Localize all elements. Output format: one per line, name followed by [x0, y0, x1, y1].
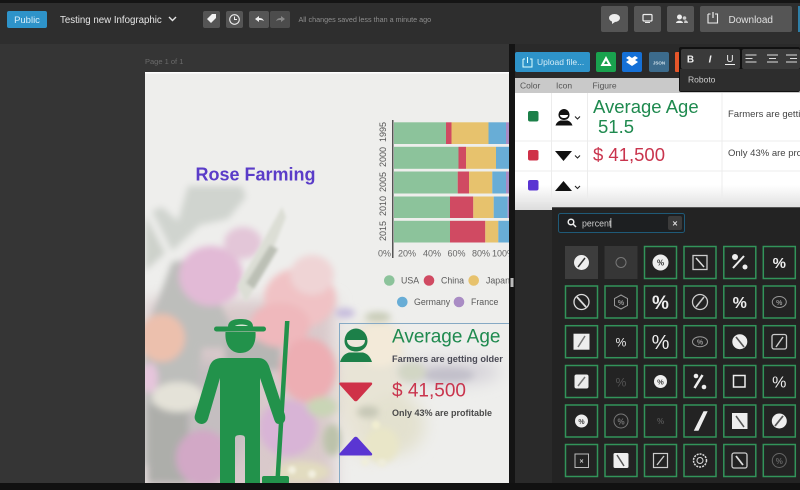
percent labels: 20% — [398, 248, 416, 258]
right side flowers — [362, 327, 398, 364]
row 3: % — [697, 340, 704, 347]
row: income — [528, 144, 800, 165]
row 3: % — [652, 332, 670, 354]
percent icons — [574, 254, 787, 468]
upload button: Upload file... — [537, 57, 584, 67]
text: profitable note: Only 43% are profitable — [392, 408, 492, 418]
json button — [649, 52, 669, 72]
search box: percent — [582, 218, 612, 228]
dark leaves — [152, 186, 246, 251]
row: income: $ 41,500 — [593, 144, 665, 165]
row 5: % — [617, 418, 625, 426]
year labels — [380, 122, 386, 240]
bar 2015 — [394, 221, 509, 242]
icon: clock — [226, 11, 243, 28]
row 2: % — [733, 295, 747, 312]
bar 2010 — [394, 196, 509, 218]
chart legend: France — [471, 297, 498, 307]
splitter bar — [509, 44, 515, 490]
row 4: % — [772, 374, 786, 392]
bar 1995 — [394, 122, 509, 144]
row 1: % — [773, 255, 786, 272]
title: Rose Farming: Rose Farming — [196, 164, 316, 184]
bold italic underline: U — [726, 54, 734, 65]
percent labels: 80% — [472, 248, 490, 258]
document title: Testing new Infographic — [60, 15, 162, 26]
chart legend: Japan — [486, 276, 510, 286]
year labels: 2000 — [378, 147, 388, 167]
row 6: % — [776, 457, 783, 466]
icon picker — [552, 207, 800, 483]
save status: All changes saved less than a minute ago — [298, 15, 431, 24]
column headers: Icon — [556, 80, 572, 90]
text: farmers note: Farmers are getting older — [392, 354, 503, 364]
icon: comment — [601, 6, 628, 32]
icon: present — [634, 6, 661, 32]
row 5 — [575, 412, 787, 430]
download button — [700, 6, 792, 32]
row: empty — [528, 180, 580, 191]
row 5: % — [578, 419, 585, 426]
search box: × — [672, 218, 678, 228]
public button — [7, 11, 47, 28]
text: income figure: $ 41,500 — [392, 380, 466, 402]
row 3 — [574, 332, 786, 354]
chart legend: China — [441, 276, 464, 286]
percent labels: 40% — [423, 248, 441, 258]
flower photo background — [139, 186, 500, 490]
row 6 — [575, 453, 786, 468]
alignment icons — [746, 55, 797, 62]
row 6: × — [579, 458, 584, 466]
icon: purple triangle — [339, 437, 372, 456]
row 2: % — [776, 300, 783, 307]
icon: drive — [596, 52, 616, 72]
row 1 — [574, 254, 786, 272]
icon: users — [667, 6, 694, 32]
percent labels: 100% — [492, 248, 515, 258]
icon: tag — [203, 11, 220, 28]
body — [195, 358, 285, 484]
roses — [179, 246, 243, 306]
bottom strip — [0, 483, 800, 490]
chart legend — [384, 275, 510, 307]
page counter: Page 1 of 1 — [145, 57, 183, 66]
pictorial box outline — [340, 324, 509, 483]
soft base tones — [145, 300, 500, 490]
search box — [558, 214, 684, 232]
row: average age — [528, 96, 800, 137]
row 1: % — [657, 258, 664, 268]
row: average age: Average Age — [593, 96, 699, 117]
bold italic underline: I — [709, 54, 712, 66]
bold italic underline: B — [687, 54, 694, 66]
row 4 — [574, 374, 786, 392]
icon: green farmer head — [340, 328, 372, 362]
public button: Public — [14, 15, 40, 26]
row 2: % — [652, 293, 669, 314]
canvas: infographic page — [139, 72, 515, 490]
percent labels — [378, 250, 509, 256]
year labels: 2005 — [378, 172, 388, 192]
column headers: Figure — [592, 80, 617, 90]
icon result grid — [566, 246, 795, 476]
column headers — [520, 80, 617, 90]
orange button — [675, 52, 681, 72]
selected tiles — [565, 246, 638, 279]
download button: Download — [728, 15, 773, 26]
font name: Roboto — [688, 74, 716, 84]
percent labels: 60% — [448, 248, 466, 258]
bold italic underline — [687, 54, 735, 66]
row 5: % — [657, 417, 664, 426]
icon: dropbox — [622, 52, 642, 72]
row 3: % — [616, 336, 627, 350]
rake — [276, 321, 290, 477]
row 4: % — [657, 378, 664, 386]
icon: undo — [249, 11, 269, 28]
stacked bar chart — [378, 120, 515, 258]
bar 2005 — [394, 172, 509, 194]
hat and head — [214, 319, 266, 353]
column headers: Color — [520, 80, 540, 90]
json button: JSON — [653, 60, 665, 66]
chart legend: Germany — [414, 297, 451, 307]
text: average age: Average Age — [392, 326, 500, 348]
data table — [515, 78, 800, 210]
year labels: 2015 — [378, 221, 388, 241]
text format popup — [679, 47, 800, 92]
chart legend: USA — [401, 276, 419, 286]
row 4: % — [616, 376, 627, 390]
year labels: 2010 — [378, 196, 388, 216]
chart axis — [392, 120, 394, 258]
farmer figure — [195, 319, 290, 484]
year labels: 1995 — [378, 122, 388, 142]
row 2 — [574, 293, 786, 314]
row: average age: 51.5 — [598, 116, 634, 137]
crisp petal details — [237, 207, 386, 478]
top toolbar — [0, 0, 800, 44]
row 2: % — [618, 300, 625, 307]
icon: red triangle — [339, 382, 372, 401]
upload button — [515, 52, 590, 72]
percent labels: 0% — [378, 248, 391, 258]
bar 2000 — [394, 147, 509, 169]
icon: redo — [270, 11, 290, 28]
side panel — [515, 44, 800, 490]
